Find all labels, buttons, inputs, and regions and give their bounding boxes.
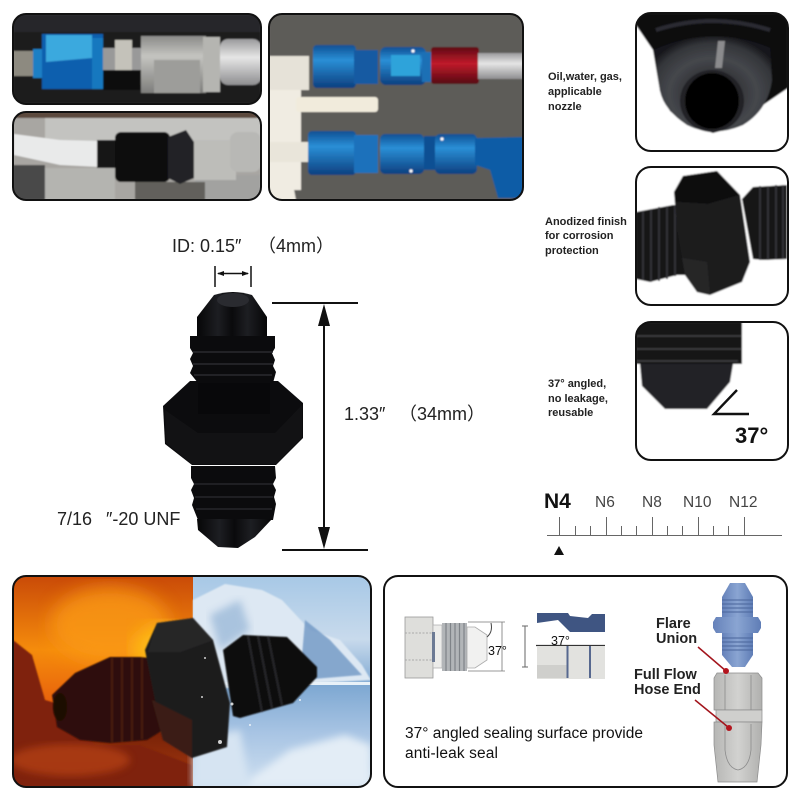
dimension: overall length: 1.33″ <box>344 404 386 424</box>
panel: flare seal diagrams <box>384 576 787 787</box>
dimension: inner diameter <box>172 236 334 287</box>
dimension: inner diameter: （4mm） <box>258 236 334 256</box>
main product: black flare union <box>163 292 303 548</box>
label: 37 degree angled <box>548 378 608 419</box>
size ruler N4 to N12: N6 <box>595 494 615 511</box>
label: oil, water, gas nozzle: applicable <box>548 86 602 98</box>
diagram: grey hose end <box>714 673 762 782</box>
label: thread size: 7/16 <box>57 509 92 529</box>
size ruler N4 to N12: N8 <box>642 494 662 511</box>
size ruler N4 to N12 <box>544 490 782 555</box>
label: oil, water, gas nozzle: Oil,water, gas, <box>548 71 622 83</box>
callout: Full Flow Hose End <box>634 667 732 731</box>
label: anodized finish: protection <box>545 245 599 257</box>
detail panel: 37 degree flare close-up <box>636 322 788 460</box>
label: oil, water, gas nozzle <box>548 71 622 113</box>
diagram: female swivel section <box>522 613 605 679</box>
hex body <box>163 381 303 465</box>
label: thread size: ″-20 UNF <box>106 509 180 529</box>
diagram: blue flare union <box>713 583 761 667</box>
diagram: male flare fitting: 37° <box>488 644 507 658</box>
label: oil, water, gas nozzle: nozzle <box>548 101 582 113</box>
top thread <box>190 336 276 383</box>
sealing surface caption <box>405 725 643 762</box>
callout: Flare Union <box>656 616 729 674</box>
label: anodized finish <box>545 216 627 257</box>
callout: Flare Union: Flare <box>656 616 691 632</box>
dimension: overall length: （34mm） <box>399 404 485 424</box>
callout: Full Flow Hose End: Hose End <box>634 682 701 698</box>
label: anodized finish: for corrosion <box>545 230 614 242</box>
callout: Full Flow Hose End: Full Flow <box>634 667 698 683</box>
dimension: inner diameter: ID: 0.15″ <box>172 236 242 256</box>
top flare nose <box>197 292 267 336</box>
detail panel: hex body close-up <box>636 167 788 305</box>
detail panel: 37 degree flare close-up: 37° <box>735 423 768 448</box>
detail panel: nozzle close-up <box>636 13 788 151</box>
sealing surface caption: anti-leak seal <box>405 745 498 762</box>
panel: fire and ice temperature resistance <box>10 576 371 787</box>
callout: Flare Union: Union <box>656 631 697 647</box>
label: thread size <box>57 509 180 529</box>
bottom flare nose <box>197 519 272 548</box>
photo panel: blue and red hose fittings <box>269 14 523 200</box>
label: anodized finish: Anodized finish <box>545 216 627 228</box>
sealing surface caption: 37° angled sealing surface provide <box>405 725 643 742</box>
photo panel: black fitting on engine <box>13 112 261 200</box>
angle mark <box>714 390 749 414</box>
label: 37 degree angled: 37° angled, <box>548 378 606 390</box>
label: 37 degree angled: reusable <box>548 407 593 419</box>
bottom thread <box>191 466 276 520</box>
label: 37 degree angled: no leakage, <box>548 393 608 405</box>
diagram: female swivel section: 37° <box>551 634 570 648</box>
dimension: overall length <box>272 303 485 550</box>
size ruler N4 to N12: N10 <box>683 494 712 511</box>
diagram: male flare fitting <box>405 617 507 678</box>
photo panel: blue and silver fittings <box>13 14 261 104</box>
size ruler N4 to N12: N4 <box>544 490 571 513</box>
size ruler N4 to N12: N12 <box>729 494 757 511</box>
fitting across fire and ice <box>52 618 317 758</box>
bore <box>217 293 249 307</box>
